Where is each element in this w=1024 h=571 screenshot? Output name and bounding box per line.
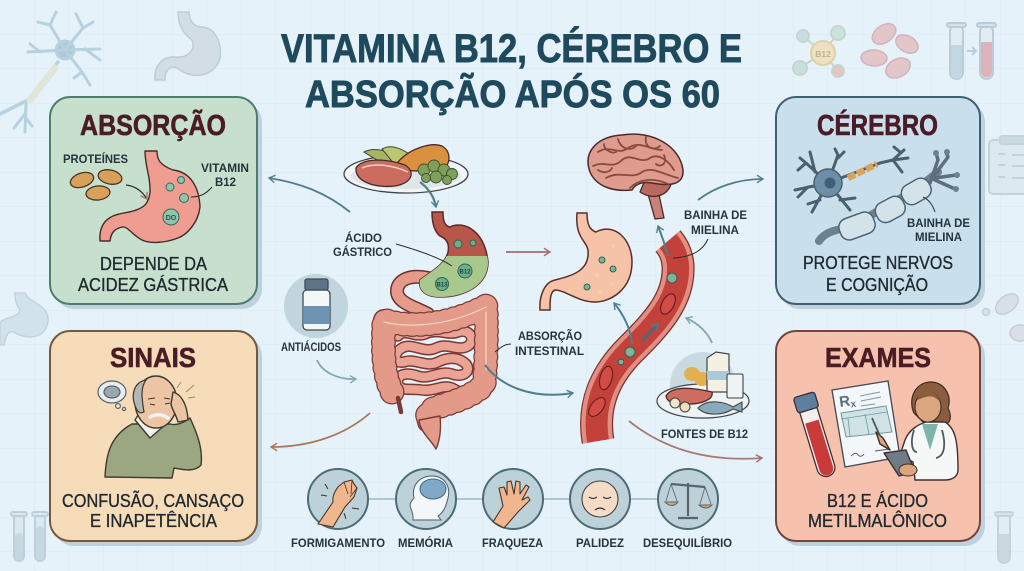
panel: exames	[776, 331, 985, 546]
panel: cérebro	[776, 97, 985, 309]
icon: doctor	[872, 382, 958, 480]
caption: protege nervos e cognição: PROTEGE NERVOS	[803, 253, 953, 273]
panel: sinais	[50, 331, 262, 546]
icon: confused elderly man	[105, 376, 201, 478]
arrow: vessel to brain	[658, 226, 668, 256]
symptom: desequilíbrio: DESEQUILÍBRIO	[643, 537, 732, 550]
decorative B12 molecule	[793, 26, 845, 77]
symptom: memória	[396, 469, 456, 550]
icon: b12 food sources	[657, 352, 749, 418]
caption: b12 e ácido metilmalônico	[808, 491, 947, 531]
icon: antacid bottle	[284, 274, 348, 338]
icon: thought bubble	[98, 381, 126, 411]
icon: blood vessel	[585, 241, 678, 441]
symptom: palidez: PALIDEZ	[576, 538, 624, 550]
icon: stomach: DO	[166, 215, 177, 222]
caption: confusão, cansaço e inapetência: E INAPETÊNCIA	[90, 511, 217, 531]
caption: depende da acidez gástrica: DEPENDE DA	[100, 254, 207, 274]
icon: myelinated nerve	[819, 149, 960, 242]
icon: digested stomach	[540, 213, 632, 310]
decorative stomach, left	[0, 293, 48, 345]
symptom: memória: MEMÓRIA	[398, 537, 453, 550]
arrow: bloodstream to exames	[629, 421, 762, 459]
decorative B12 molecule: B12	[815, 49, 831, 59]
icon: stomach	[100, 151, 212, 242]
large intestine	[383, 306, 486, 422]
label: absorção intestinal: INTESTINAL	[515, 346, 584, 358]
label: antiácidos: ANTIÁCIDOS	[281, 341, 341, 354]
panel: absorção	[50, 97, 262, 309]
label: ácido gástrico: ÁCIDO	[345, 232, 382, 245]
icon: prescription sheet: x	[850, 399, 857, 410]
caption: protege nervos e cognição: E COGNIÇÃO	[826, 274, 928, 295]
label: absorção intestinal	[495, 330, 584, 358]
label: bainha de mielina, center: BAINHA DE	[684, 210, 747, 222]
label: fontes de b12: FONTES DE B12	[661, 429, 748, 441]
label: bainha de mielina: BAINHA DE	[907, 218, 970, 230]
caption: b12 e ácido metilmalônico: METILMALÔNICO	[808, 510, 947, 531]
heading: exames: EXAMES	[825, 342, 931, 373]
decorative red blood cells	[861, 20, 921, 82]
caption: protege nervos e cognição	[803, 253, 953, 295]
icon: neuron with axon	[795, 147, 908, 212]
duodenum	[397, 277, 428, 314]
small intestine	[395, 331, 472, 394]
label: absorção intestinal: ABSORÇÃO	[518, 330, 582, 343]
arrow: proteins to stomach	[126, 185, 147, 199]
symptom: desequilíbrio	[643, 469, 732, 550]
icon: prescription sheet: R	[838, 393, 851, 411]
arrow: central to absorção	[269, 178, 350, 212]
caption: depende da acidez gástrica	[78, 254, 228, 295]
decorative test tubes, bottom left	[11, 512, 48, 561]
label: proteínes: PROTEÍNES	[63, 153, 128, 166]
label: ácido gástrico	[333, 232, 452, 266]
symptom: fraqueza: FRAQUEZA	[482, 538, 543, 550]
caption: confusão, cansaço e inapetência	[62, 490, 244, 531]
title: VITAMINA B12, CÉREBRO E	[281, 26, 742, 71]
label: bainha de mielina	[907, 218, 970, 244]
arrow: stomach to stomach	[506, 251, 550, 253]
icon: prescription sheet	[832, 381, 900, 467]
heading: absorção: ABSORÇÃO	[80, 108, 226, 142]
label: vitamin b12: B12	[215, 177, 236, 189]
label: bainha de mielina: MIELINA	[915, 232, 962, 244]
icon: food plate	[344, 145, 468, 193]
arrow: vessel to stomach	[614, 303, 632, 344]
label: bainha de mielina, center	[673, 210, 747, 258]
decorative blood cells, right edge	[982, 290, 1024, 341]
caption: depende da acidez gástrica: ACIDEZ GÁSTRICA	[78, 275, 228, 295]
symptoms row	[291, 469, 732, 550]
arrow: brain to cérebro	[698, 179, 763, 200]
title: ABSORÇÃO APÓS OS 60	[305, 72, 720, 116]
decorative test tube, bottom right	[995, 512, 1013, 563]
heading: sinais: SINAIS	[110, 342, 196, 373]
symptom: fraqueza	[482, 469, 543, 550]
symptom: palidez	[570, 469, 630, 550]
label: ácido gástrico: GÁSTRICO	[333, 246, 392, 259]
arrow: antacids to intestine	[317, 360, 356, 379]
decorative clipboard	[989, 136, 1024, 194]
decorative stomach, top	[155, 12, 220, 80]
connector lines	[368, 498, 658, 500]
stomach with acid: B12	[459, 270, 471, 276]
heading: cérebro: CÉREBRO	[817, 108, 938, 142]
icon: protein pills	[68, 168, 123, 201]
arrow: intestine to bloodstream	[485, 365, 573, 395]
caption: b12 e ácido metilmalônico: B12 E ÁCIDO	[827, 491, 928, 511]
arrow: intestine to sinais	[271, 413, 370, 447]
symptom: formigamento: FORMIGAMENTO	[291, 538, 385, 550]
title	[281, 26, 742, 116]
decorative test tubes, top right	[947, 23, 996, 79]
label: bainha de mielina, center: MIELINA	[691, 225, 739, 237]
caption: confusão, cansaço e inapetência: CONFUSÃO, CANSAÇO	[62, 490, 244, 511]
arrow: food to vessel	[686, 318, 712, 343]
symptom: formigamento	[291, 469, 385, 550]
icon: brain	[588, 134, 683, 219]
icon: blood tube	[793, 392, 839, 479]
label: vitamin b12: VITAMIN	[201, 163, 249, 175]
label: vitamin b12	[201, 163, 249, 189]
icon: digestive tract	[383, 212, 488, 449]
decorative neuron, top left	[0, 12, 100, 132]
arrow: plate to stomach	[420, 182, 436, 207]
stomach with acid	[420, 212, 488, 297]
stomach with acid: B13	[436, 282, 448, 288]
